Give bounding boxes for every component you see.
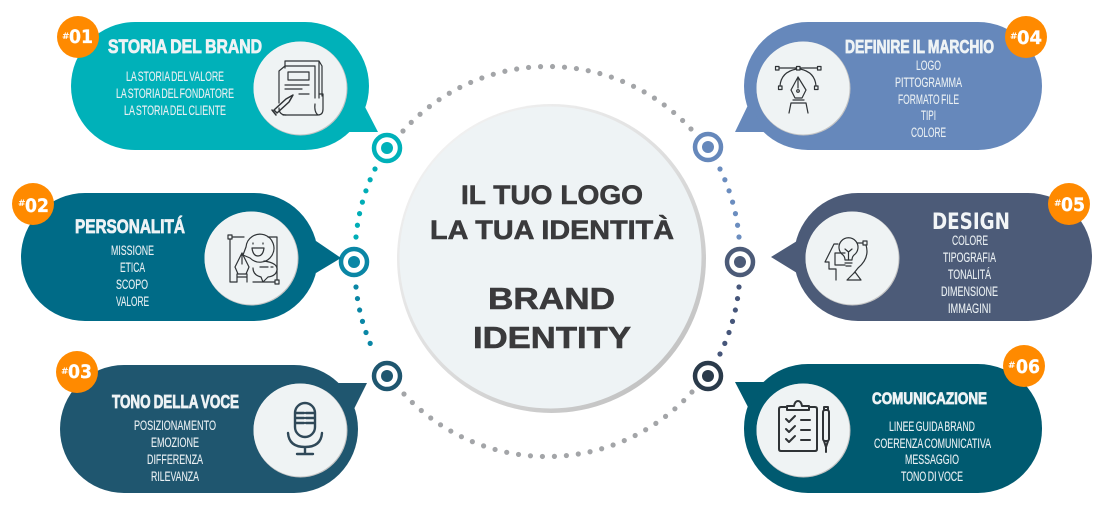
badge 05: [1048, 183, 1090, 225]
list: definire il marchio: PITTOGRAMMA: [895, 75, 962, 90]
list: tono della voce: [134, 418, 216, 484]
list: tono della voce: POSIZIONAMENTO: [134, 418, 216, 433]
badge 03: #: [61, 367, 69, 377]
node 1: [374, 135, 400, 161]
heading: storia del brand: STORIA DEL BRAND: [108, 36, 262, 58]
panel: design: [771, 183, 1092, 321]
panel: definire il marchio: [735, 16, 1047, 150]
panel: storia del brand: [57, 16, 378, 150]
list: definire il marchio: TIPI: [921, 108, 936, 123]
list: design: TIPOGRAFIA: [943, 250, 996, 265]
list: storia del brand: LA STORIA DEL CLIENTE: [124, 103, 226, 118]
icon: clipboard and pen: [756, 384, 850, 478]
list: comunicazione: LINEE GUIDA BRAND: [889, 419, 975, 434]
badge 02: 02: [25, 196, 49, 217]
list: storia del brand: LA STORIA DEL VALORE: [126, 69, 224, 84]
icon: vector pen: [756, 42, 850, 136]
panel: personalita: [12, 183, 341, 321]
badge 01: [57, 16, 99, 58]
list: definire il marchio: [895, 58, 962, 140]
central heading: brand: BRAND: [488, 281, 615, 316]
list: tono della voce: RILEVANZA: [151, 469, 199, 484]
badge 06: 06: [1016, 357, 1040, 378]
list: personalita: MISSIONE: [111, 243, 154, 258]
list: design: TONALITÁ: [948, 267, 991, 282]
node 4: [695, 134, 721, 160]
central circle: [397, 104, 706, 413]
badge 01: #: [62, 32, 70, 42]
list: personalita: ETICA: [120, 260, 145, 275]
badge 02: #: [18, 199, 26, 209]
heading: comunicazione: COMUNICAZIONE: [872, 389, 987, 408]
node 2: [341, 249, 367, 275]
badge 06: [1003, 345, 1045, 387]
list: definire il marchio: FORMATO FILE: [898, 92, 959, 107]
list: comunicazione: MESSAGGIO: [905, 452, 959, 467]
list: comunicazione: COERENZA COMUNICATIVA: [874, 436, 991, 451]
panel: comunicazione: [735, 345, 1045, 493]
list: definire il marchio: LOGO: [916, 58, 941, 73]
list: comunicazione: [874, 419, 991, 484]
central heading: la tua identita: LA TUA IDENTITÀ: [430, 214, 674, 245]
badge 03: 03: [68, 362, 92, 383]
list: design: IMMAGINI: [948, 301, 991, 316]
node 6: [695, 363, 721, 389]
node 3: [374, 363, 400, 389]
heading: design: DESIGN: [932, 210, 1010, 235]
badge 02: [12, 183, 54, 225]
badge 04: #: [1010, 32, 1018, 42]
icon: pen and smile: [204, 212, 298, 306]
list: personalita: VALORE: [116, 294, 149, 309]
dotted ring: [356, 66, 739, 457]
heading: personalita: PERSONALITÁ: [75, 215, 185, 238]
panel: tono della voce: [56, 351, 367, 493]
list: definire il marchio: COLORE: [911, 125, 946, 140]
badge 04: [1005, 16, 1047, 58]
icon: head and light bulb: [806, 212, 900, 306]
list: personalita: [111, 243, 154, 309]
list: comunicazione: TONO DI VOCE: [901, 469, 963, 484]
badge 04: 04: [1017, 28, 1042, 49]
list: tono della voce: EMOZIONE: [151, 435, 199, 450]
list: storia del brand: LA STORIA DEL FONDATORE: [116, 86, 234, 101]
heading: definire il marchio: DEFINIRE IL MARCHIO: [845, 37, 994, 57]
list: storia del brand: [116, 69, 234, 118]
list: tono della voce: DIFFERENZA: [147, 452, 203, 467]
badge 05: #: [1054, 199, 1062, 209]
list: design: COLORE: [952, 233, 988, 248]
icon: microphone: [254, 384, 348, 478]
heading: tono della voce: TONO DELLA VOCE: [112, 392, 239, 412]
badge 03: [56, 351, 98, 393]
icon: document and pencil: [254, 42, 348, 136]
central heading: identity: IDENTITY: [473, 320, 631, 355]
badge 05: 05: [1061, 195, 1085, 216]
badge 06: #: [1008, 361, 1016, 371]
central heading: il tuo logo: IL TUO LOGO: [461, 180, 643, 210]
node 5: [727, 249, 753, 275]
list: design: DIMENSIONE: [941, 284, 998, 299]
list: personalita: SCOPO: [116, 277, 148, 292]
badge 01: 01: [69, 27, 93, 48]
list: design: [941, 233, 998, 316]
